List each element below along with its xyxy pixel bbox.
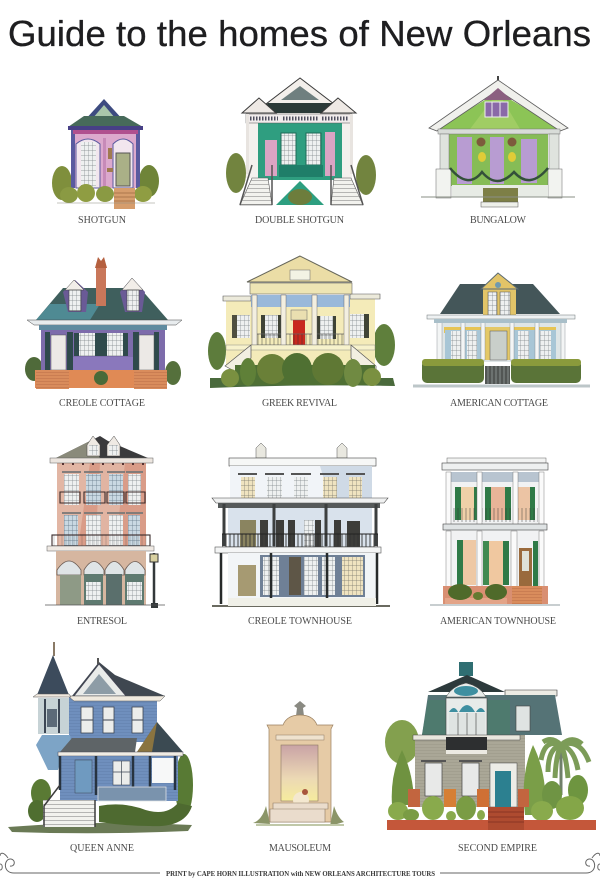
panel: double shotgun	[226, 78, 376, 226]
footer	[0, 853, 600, 878]
illustration: american cottage house	[413, 273, 590, 386]
illustration: mausoleum	[253, 701, 344, 826]
panel: greek revival	[208, 256, 395, 409]
panel: mausoleum	[253, 701, 344, 854]
panel: creole townhouse	[212, 443, 390, 627]
illustration: shotgun house	[52, 99, 159, 209]
title: Guide to the homes of New Orleans	[8, 13, 591, 54]
label: GREEK REVIVAL	[262, 398, 337, 409]
illustration: creole townhouse building	[212, 443, 390, 606]
label: BUNGALOW	[470, 215, 527, 226]
illustration: double shotgun house	[226, 78, 376, 205]
label: AMERICAN COTTAGE	[450, 398, 548, 409]
panel: american cottage	[413, 273, 590, 409]
label: SHOTGUN	[78, 215, 126, 226]
illustration: greek revival house	[208, 256, 395, 388]
ornament: right swirl	[440, 853, 600, 873]
illustration: creole cottage house	[25, 257, 182, 389]
panel: bungalow	[421, 76, 575, 226]
label: DOUBLE SHOTGUN	[255, 215, 344, 226]
panel: entresol	[45, 436, 165, 627]
panel: creole cottage	[25, 257, 182, 409]
footer credit: PRINT by CAPE HORN ILLUSTRATION with NEW ORLEANS ARCHITECTURE TOURS	[166, 871, 435, 878]
label: AMERICAN TOWNHOUSE	[440, 616, 556, 627]
illustration: queen anne house	[8, 642, 193, 833]
label: CREOLE TOWNHOUSE	[248, 616, 352, 627]
panel: queen anne	[8, 642, 193, 854]
label: MAUSOLEUM	[269, 843, 331, 854]
illustration: american townhouse building	[430, 458, 560, 605]
panel: second empire	[385, 662, 596, 854]
illustration: bungalow house	[421, 76, 575, 207]
label: CREOLE COTTAGE	[59, 398, 145, 409]
label: QUEEN ANNE	[70, 843, 134, 854]
ornament: left swirl	[0, 853, 160, 873]
label: ENTRESOL	[77, 616, 127, 627]
illustration: second empire house	[385, 662, 596, 830]
panel: american townhouse	[430, 458, 560, 627]
label: SECOND EMPIRE	[458, 843, 537, 854]
panel: shotgun	[52, 99, 159, 226]
illustration: entresol building	[45, 436, 165, 608]
